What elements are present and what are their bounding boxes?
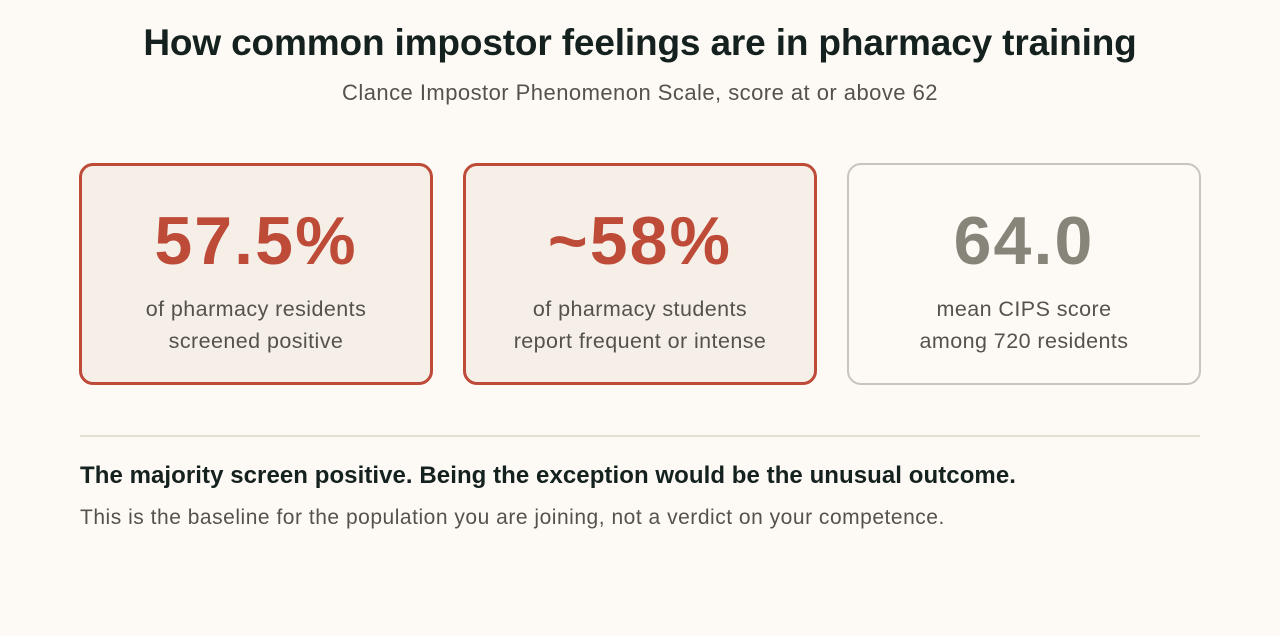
stat description: of pharmacy students [533, 297, 747, 321]
title: How common impostor feelings are in pharmacy training [143, 22, 1137, 63]
stat description: among 720 residents [920, 329, 1128, 353]
stat description: report frequent or intense [514, 329, 766, 353]
stat value: ~58% [548, 203, 732, 279]
panel: pharmacy residents stat [79, 163, 433, 385]
subtitle: Clance Impostor Phenomenon Scale, score at or above 62 [342, 80, 938, 105]
card background [847, 163, 1201, 385]
takeaway body text: This is the baseline for the population you are joining, not a verdict on your competence. [80, 506, 945, 529]
stat value: 57.5% [154, 203, 358, 279]
stat description: screened positive [169, 329, 343, 353]
stat description: of pharmacy residents [146, 297, 366, 321]
stat description [920, 297, 1128, 353]
takeaway heading: The majority screen positive. Being the exception would be the unusual outcome. [80, 462, 1016, 489]
card background [79, 163, 433, 385]
stat description [514, 297, 766, 353]
panel: pharmacy students stat [463, 163, 817, 385]
stat value: 64.0 [954, 203, 1094, 279]
stat description: mean CIPS score [937, 297, 1111, 321]
card background [463, 163, 817, 385]
stat description [146, 297, 366, 353]
panel: mean CIPS score stat [847, 163, 1201, 385]
